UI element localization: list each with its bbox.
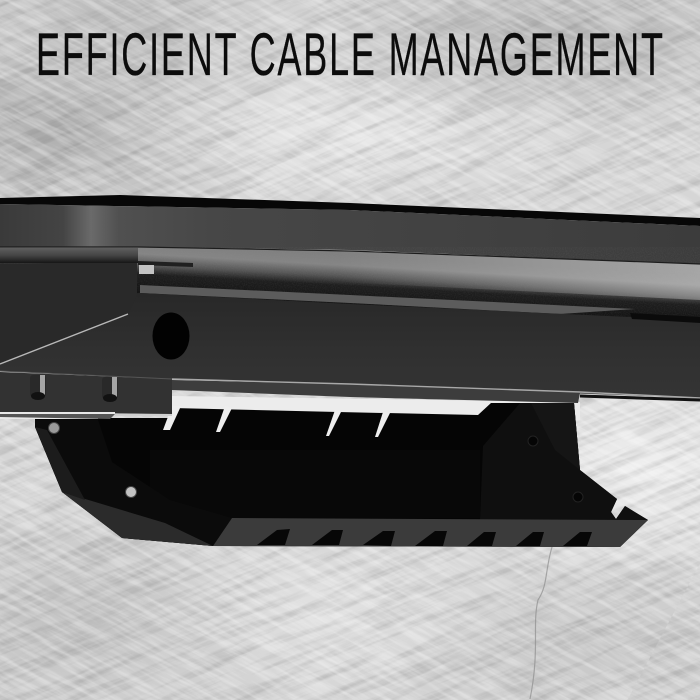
left foot top line	[0, 371, 172, 379]
title: EFFICIENT CABLE MANAGEMENT	[36, 22, 663, 88]
bracket slot and glint	[138, 261, 193, 267]
lower rail white highlight	[172, 379, 700, 398]
rail shadow below crease	[0, 247, 700, 264]
bracket highlight edge	[0, 314, 128, 364]
left stud	[30, 375, 46, 400]
rail top face	[0, 204, 700, 264]
bottom white slats	[0, 412, 172, 419]
rail black top edge	[0, 195, 700, 226]
tray front strip slots	[257, 529, 592, 546]
rail mid face with highlight	[0, 247, 700, 325]
tray front strip	[213, 518, 648, 547]
dark bolt right lower	[573, 492, 583, 502]
right stud	[102, 377, 118, 402]
rail front face	[0, 293, 700, 398]
lower rail strip	[172, 380, 580, 403]
silver bolt left top	[48, 422, 60, 434]
left foot block	[0, 372, 172, 414]
oval cable hole	[152, 312, 190, 360]
tray inner lower band	[150, 450, 480, 518]
tray right dark gusset	[531, 403, 580, 470]
tray left lower facet	[62, 492, 213, 546]
rail dark edge on right	[630, 313, 700, 323]
tray left outer facet	[35, 427, 85, 500]
left angled bracket	[0, 261, 137, 363]
bright wall gap behind tray	[172, 396, 580, 420]
rail lower grey strip	[140, 285, 635, 314]
tray right inner panel	[480, 403, 648, 520]
dark bolt right top	[528, 436, 538, 446]
tray left end panel	[35, 420, 232, 546]
cable tray	[35, 403, 648, 547]
wall crack	[530, 547, 552, 699]
bracket shadow above	[0, 248, 138, 263]
mounting rail	[0, 195, 700, 419]
tray back and right end silhouette	[35, 403, 648, 547]
tray top comb notches	[163, 406, 390, 437]
silver bolt left lower	[126, 486, 136, 498]
